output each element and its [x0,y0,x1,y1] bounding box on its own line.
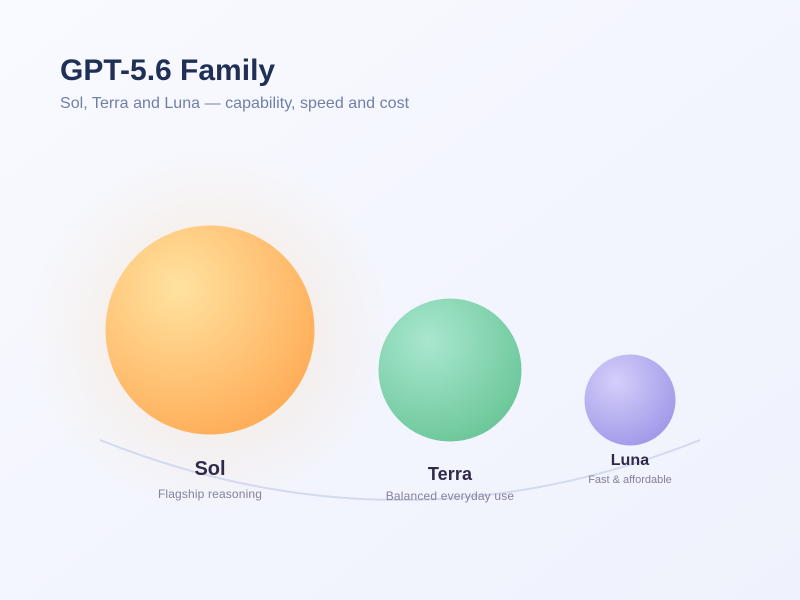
label: Luna: Luna [611,452,649,469]
title: GPT-5.6 Family [60,54,275,87]
label: Sol: Sol [194,458,226,480]
caption: Terra: Balanced everyday use [386,489,514,503]
caption: Luna: Fast & affordable [588,474,672,486]
caption: Sol: Flagship reasoning [158,487,262,501]
sphere: Sol [106,226,314,434]
glow: Sol [28,148,392,512]
sphere: Terra [378,298,522,442]
label: Terra: Terra [428,464,472,484]
orbit arc [100,440,700,500]
subtitle: Sol, Terra and Luna — capability, speed and cost [60,95,409,112]
sphere: Luna [584,354,676,446]
